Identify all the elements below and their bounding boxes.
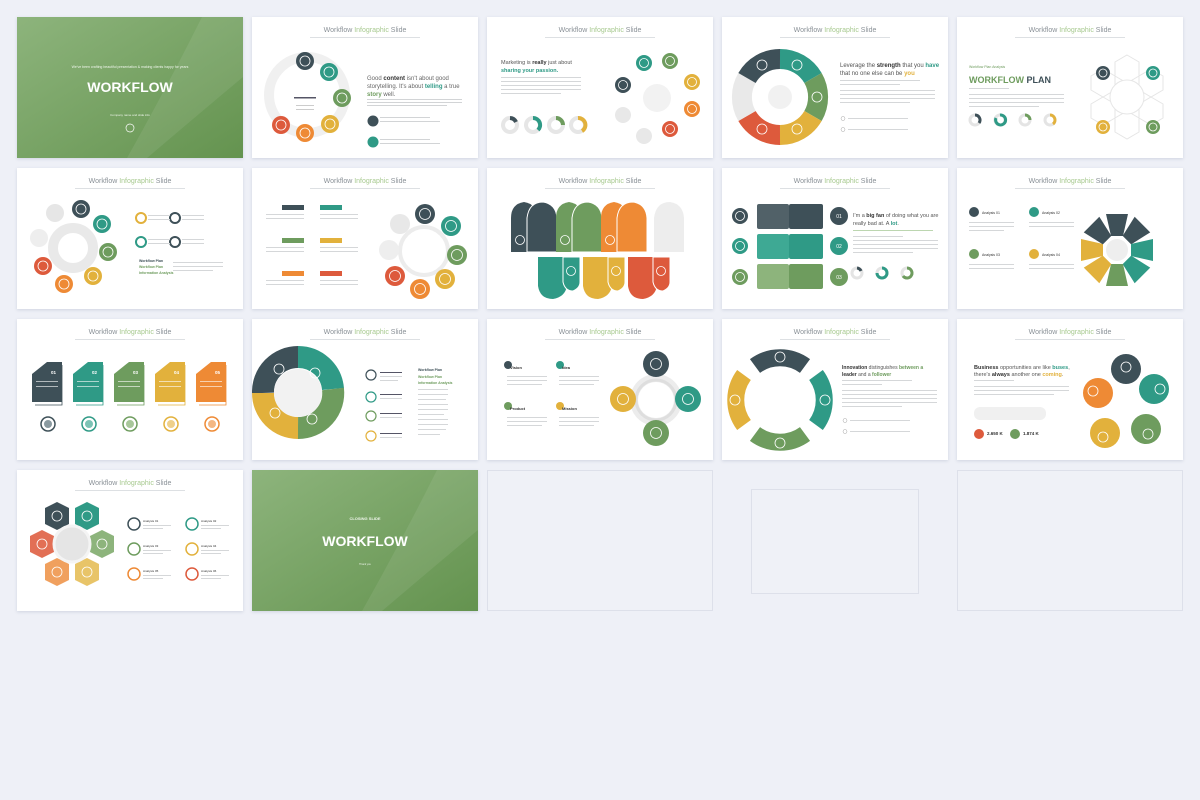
slide: analysis petals: Analysis 04 — [1042, 253, 1060, 257]
slide: workflow plan hexagons: Workflow Infographic Slide — [1029, 27, 1111, 34]
slide: big donut ring: Workflow Plan — [418, 368, 442, 372]
slide: circle ring with two columns — [17, 168, 243, 309]
slide: vision product mission — [487, 319, 713, 460]
slide: vision product mission: Idea — [562, 365, 571, 370]
slide: innovation ring — [722, 319, 948, 460]
slide: innovation ring: Innovation distinguishes between a — [842, 365, 923, 371]
slide: business chain: 1.874 K — [1023, 431, 1040, 436]
slide: ring of circles with text: Good content isn't about good — [367, 76, 449, 82]
slide: big donut ring — [252, 319, 478, 460]
slide: segmented donut leverage strength — [722, 17, 948, 158]
slide: business chain: 2.650 K — [987, 431, 1004, 436]
slide: vision product mission: Mission — [562, 406, 577, 411]
slide: hexagon cluster with list: Analysis 02 — [201, 519, 217, 523]
slide: workflow plan hexagons: WORKFLOW PLAN — [969, 75, 1051, 85]
slide: analysis petals: Workflow Infographic Slide — [1029, 178, 1111, 185]
slide: business chain: there's always another one coming. — [974, 372, 1064, 378]
slide: circle ring with two columns: Information Analysis — [139, 271, 174, 275]
slide: segmented donut leverage strength: that no one else can be you — [840, 71, 915, 77]
slide: big fan boxes: 02 — [836, 244, 842, 250]
slide: big fan boxes: 01 — [836, 214, 842, 220]
slide: segmented donut leverage strength: Leverage the strength that you have — [840, 63, 940, 69]
slide: big fan boxes: I'm a big fan of doing what you are — [853, 213, 938, 219]
slide: cover workflow — [17, 17, 243, 158]
slide: big fan boxes: really bad at. A lot. — [853, 221, 899, 227]
slide: big fan boxes: Workflow Infographic Slide — [794, 178, 876, 185]
slide: closing workflow: CLOSING SLIDE — [349, 516, 381, 521]
slide: five tags: 03 — [133, 370, 139, 375]
slide: closing workflow: WORKFLOW — [322, 533, 409, 549]
slide: circle ring with two columns: Workflow Plan — [139, 259, 163, 263]
slide: big fan boxes: 03 — [836, 275, 842, 281]
slide: five tags: Workflow Infographic Slide — [89, 329, 171, 336]
slide: analysis petals — [957, 168, 1183, 309]
slide: cover workflow: WORKFLOW — [87, 79, 174, 95]
slide: closing workflow: Thank you — [359, 563, 371, 566]
slide: labels and circle cluster — [252, 168, 478, 309]
slide: hexagon cluster with list: Workflow Infographic Slide — [89, 480, 171, 487]
slide: analysis petals: Analysis 02 — [1042, 211, 1060, 215]
slide: closing workflow — [252, 470, 478, 611]
slide: big fan boxes — [722, 168, 948, 309]
slide: hexagon cluster with list: Analysis 05 — [143, 569, 159, 573]
slide: five tags: 02 — [92, 370, 98, 375]
slide: analysis petals: Analysis 03 — [982, 253, 1000, 257]
slide: ring of circles with text: story well. — [367, 92, 396, 98]
slide: circle ring with two columns: Workflow Plan — [139, 265, 163, 269]
slide: cover workflow: We've been crafting beautiful presentation & making clients happy for years — [72, 65, 189, 69]
slide: hexagon cluster with list: Analysis 04 — [201, 544, 217, 548]
slide: ring of circles with text: Workflow Infographic Slide — [324, 27, 406, 34]
slide: hexagon cluster with list: Analysis 01 — [143, 519, 159, 523]
slide: hexagon cluster with list: Analysis 03 — [143, 544, 159, 548]
empty placeholder slides — [487, 470, 713, 611]
slide: innovation ring: leader and a follower — [842, 372, 891, 378]
slide: arches wave — [487, 168, 713, 309]
slide: business chain — [957, 319, 1183, 460]
slide: ring of circles with text — [252, 17, 478, 158]
slide: big donut ring: Workflow Plan — [418, 375, 442, 379]
slide: marketing passion: Marketing is really just about — [501, 60, 572, 66]
slide: marketing passion — [487, 17, 713, 158]
slide: business chain: Business opportunities are like buses, — [974, 365, 1070, 371]
slide: five tags — [17, 319, 243, 460]
slide: segmented donut leverage strength: Workflow Infographic Slide — [794, 27, 876, 34]
slide: innovation ring: Workflow Infographic Slide — [794, 329, 876, 336]
slide: five tags: 01 — [51, 370, 57, 375]
slide: vision product mission: Workflow Infographic Slide — [559, 329, 641, 336]
slide: marketing passion: Workflow Infographic Slide — [559, 27, 641, 34]
slide: workflow plan hexagons: Workflow Plan Analysis — [969, 65, 1005, 69]
slide: workflow plan hexagons — [957, 17, 1183, 158]
slide: big donut ring: Information Analysis — [418, 381, 453, 385]
slide: hexagon cluster with list: Analysis 06 — [201, 569, 217, 573]
slide: cover workflow: Company name and slide info — [110, 113, 150, 117]
slide: arches wave: Workflow Infographic Slide — [559, 178, 641, 185]
slide: five tags: 05 — [215, 370, 221, 375]
slide: big donut ring: Workflow Infographic Slide — [324, 329, 406, 336]
slide: five tags: 04 — [174, 370, 180, 375]
slide: analysis petals: Analysis 01 — [982, 211, 1000, 215]
slide: labels and circle cluster: Workflow Infographic Slide — [324, 178, 406, 185]
slide: business chain: Workflow Infographic Slide — [1029, 329, 1111, 336]
slide: vision product mission: Product — [510, 406, 526, 411]
slide: marketing passion: sharing your passion. — [501, 68, 559, 74]
slide: vision product mission: Vision — [510, 365, 522, 370]
slide: ring of circles with text: storytelling. It's about telling a true — [367, 84, 460, 90]
slide: circle ring with two columns: Workflow Infographic Slide — [89, 178, 171, 185]
slide: hexagon cluster with list — [17, 470, 243, 611]
